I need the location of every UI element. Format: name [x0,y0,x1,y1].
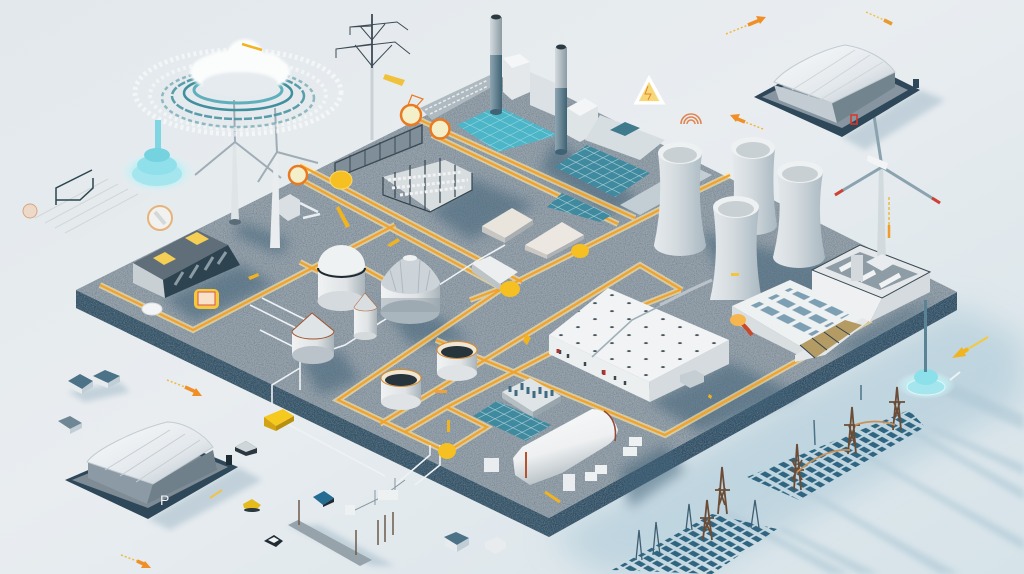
open tank right [437,342,477,381]
turbine left 2 [258,108,318,248]
arrow bottom left [121,555,151,568]
arrow lower left [167,380,202,396]
arrow at right beacon [952,337,988,358]
hall right wall [649,340,729,402]
chimney 1 [490,14,502,115]
top right hangar [754,45,920,137]
info circle icon [148,206,172,230]
arrow down at right turbine [888,197,890,238]
platform top surface [76,71,957,518]
cooling tower right [773,161,825,268]
vehicles [235,441,334,547]
south towers [700,467,730,540]
east towers [790,387,905,490]
arrow above towers [730,114,763,129]
long shadows on the ground [722,380,1024,574]
hall roof [549,288,729,382]
small houses [58,370,506,554]
lattice grid south [612,467,777,574]
cloud arrow [242,44,262,50]
road node circles [289,95,589,459]
left machine hall [133,230,240,298]
silo front [292,313,334,364]
small yellow markers on platform [248,206,712,432]
ground data pad [23,170,150,240]
solar array: cyan [457,106,558,152]
cyan beacon left [119,120,195,193]
small pump unit [279,194,320,221]
white pipe network [250,245,505,485]
white road marker [142,303,162,315]
arrow top right [866,12,892,24]
hall left wall [549,335,650,402]
substation fence and transformers [335,125,472,212]
object ground shadows [68,90,945,566]
cloud data rings [135,50,341,134]
cooling tower back middle [731,137,777,235]
road buildings [472,208,584,290]
roadside power strip [288,478,405,566]
transmission pylon [336,14,410,140]
platform right side [549,292,957,537]
right utility building [812,245,930,322]
substation block [502,378,561,418]
isometric platform [76,71,957,537]
platform ground shadow [549,305,1024,574]
warning triangle icon [636,78,663,103]
cloud [190,39,290,96]
solar array: large teal [555,145,650,197]
solar array: lower [473,401,551,441]
small silo [354,293,377,340]
cyan beacon right [896,300,960,399]
main hall [549,280,729,402]
chimney 2 [555,44,567,155]
cooling tower back left [654,142,706,256]
dome tank [318,245,365,311]
pylon yellow tag [383,74,405,86]
turbine left 1 [195,100,281,225]
bottom left hangar [65,422,238,519]
solar array: small [547,193,612,222]
platform left side [76,290,549,537]
hall windows [560,350,625,385]
hall pipes [660,280,712,305]
arrow top center [726,16,766,34]
arrow by hangar [210,490,222,498]
cooling tower front [710,196,762,300]
turbine right [835,103,940,271]
wifi signal icon [681,114,701,124]
hall loading dock [680,370,704,388]
road glow [100,120,867,452]
large silo [380,255,440,324]
lattice grid east [747,385,925,500]
back factory buildings [420,54,665,160]
yellow junction box [264,409,294,431]
open tank left [381,370,421,410]
alert badge [194,289,219,309]
solar strips [620,165,712,215]
hangar P sign: P [160,492,169,508]
road network: amber glow lines [100,120,867,452]
horizontal storage tank [484,409,642,491]
solar roof building [730,280,868,362]
surface shadows [164,140,940,508]
yellow arrow near tank [545,492,560,502]
road core [100,120,867,452]
